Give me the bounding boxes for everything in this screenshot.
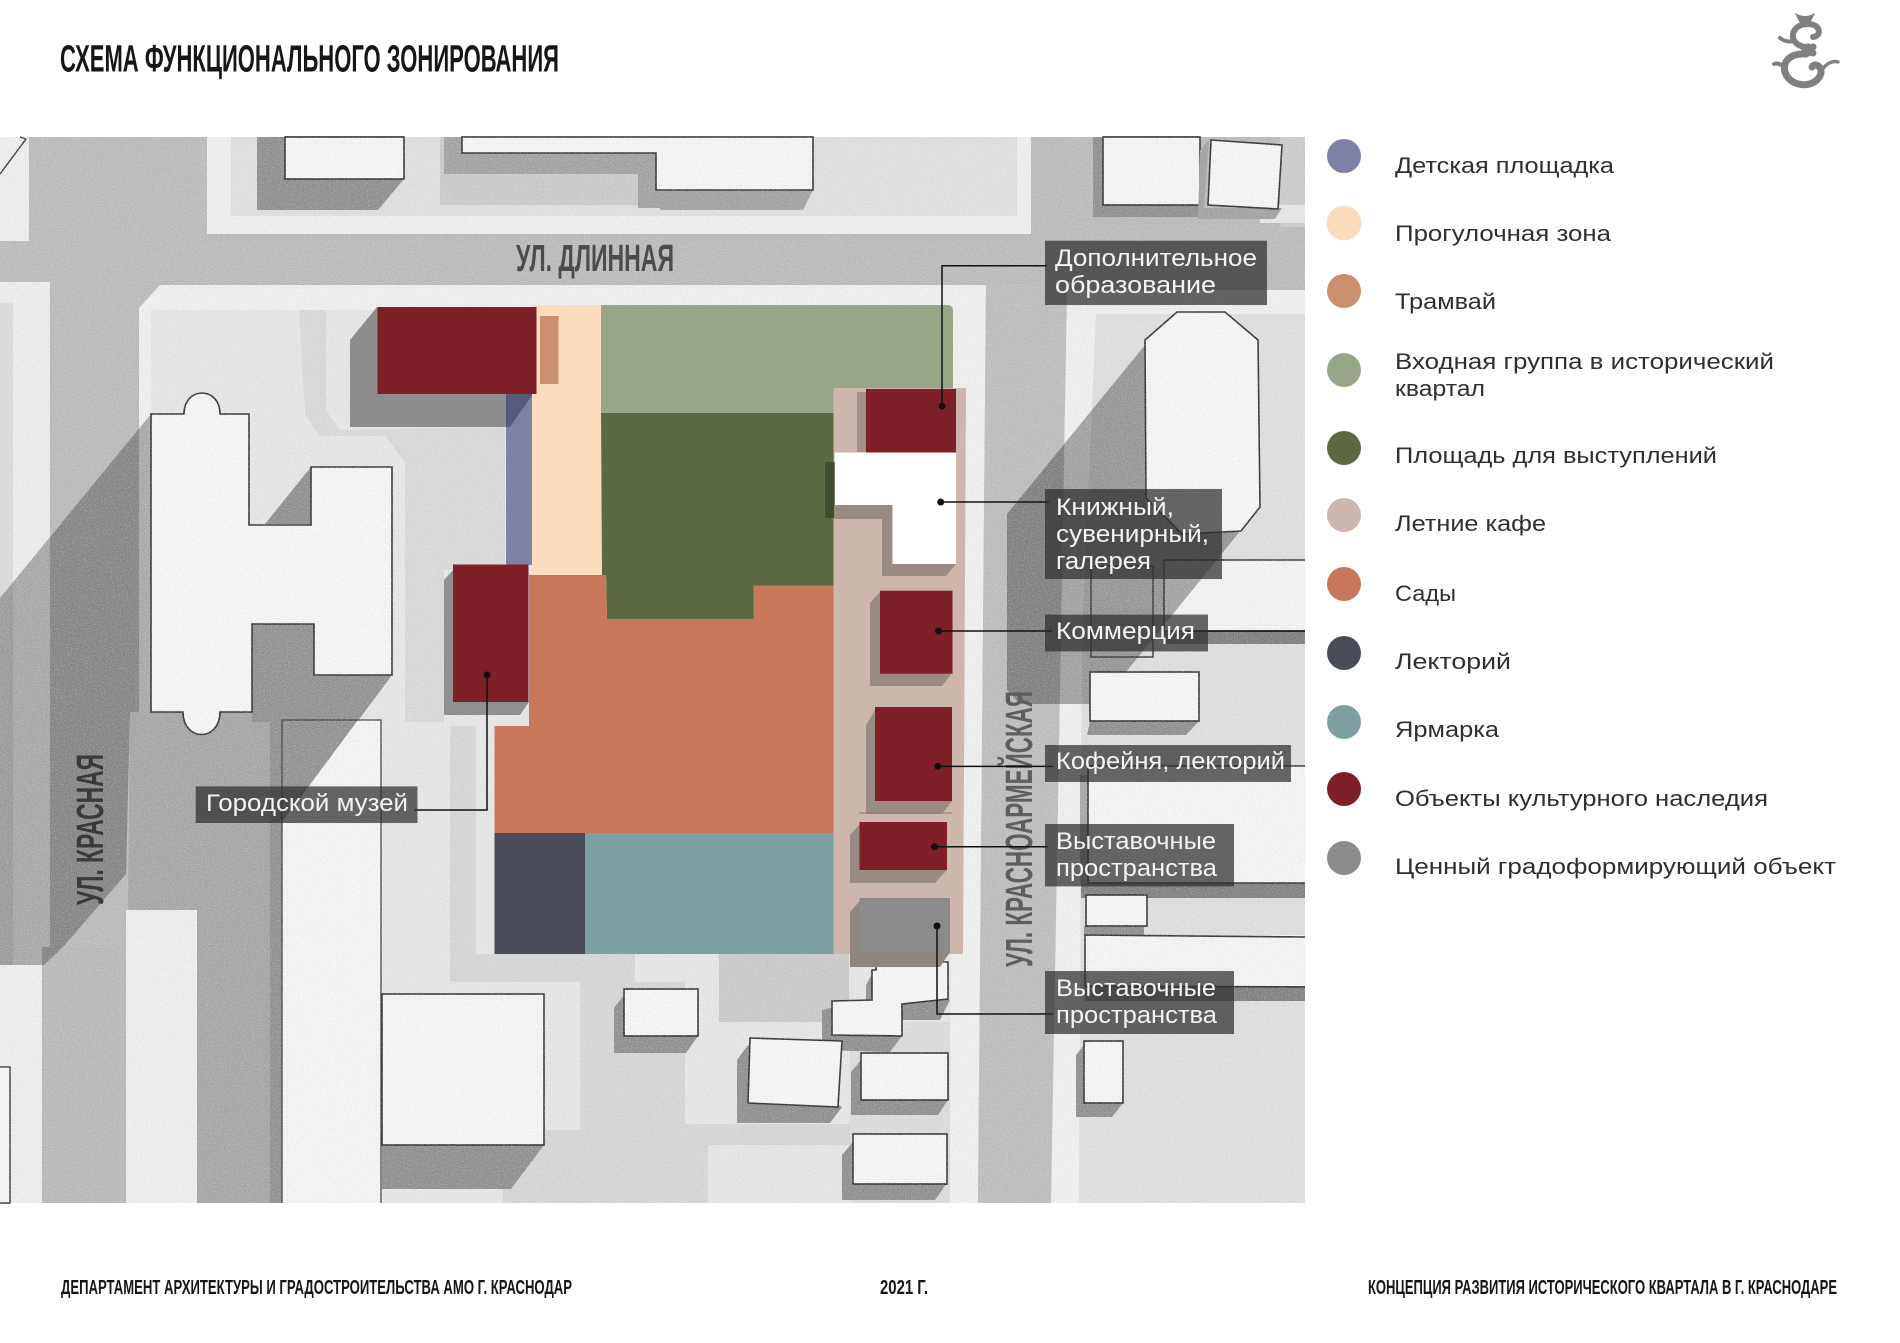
icon: ornamental logo bbox=[1774, 15, 1838, 85]
right block ground bbox=[1051, 290, 1305, 1203]
top right block bbox=[1093, 137, 1305, 227]
zone: gardens bbox=[494, 575, 834, 834]
street label: Красная: УЛ. КРАСНАЯ bbox=[70, 754, 112, 905]
callout: book souvenir gallery: сувенирный, bbox=[1056, 521, 1209, 548]
building: large historic building shadows bbox=[252, 467, 392, 822]
legend item: tram bbox=[1327, 274, 1496, 314]
building: L-shaped bbox=[832, 962, 948, 1036]
footer: year: 2021 Г. bbox=[880, 1277, 928, 1299]
building: large historic building bbox=[151, 393, 392, 734]
building: small C bbox=[861, 1053, 948, 1100]
legend item: fair bbox=[1327, 705, 1500, 742]
callout: exhibition spaces 2: Выставочные bbox=[1056, 975, 1216, 1002]
legend item: lecture hall bbox=[1327, 636, 1511, 674]
top left block bbox=[0, 137, 50, 965]
callout: exhibition spaces 1: Выставочные bbox=[1056, 828, 1216, 855]
zone: lecture hall bbox=[494, 833, 585, 954]
grain overlay light bbox=[0, 137, 1305, 1203]
callout: additional education: образование bbox=[1055, 272, 1216, 299]
legend item: heritage objects bbox=[1327, 772, 1768, 811]
zone: tram bbox=[540, 316, 558, 384]
legend item: performance square: Площадь для выступлений bbox=[1395, 443, 1717, 468]
legend item: valuable object bbox=[1327, 841, 1836, 879]
zone: fair bbox=[585, 833, 834, 954]
main block ground bbox=[139, 285, 986, 1203]
building: east long G bbox=[1085, 935, 1305, 1001]
legend item: lecture hall: Лекторий bbox=[1395, 649, 1511, 674]
heritage object: coffee lecture bbox=[859, 707, 952, 814]
legend item: entrance group bbox=[1327, 349, 1774, 401]
building: east small I bbox=[1087, 672, 1199, 735]
callout: book souvenir gallery bbox=[937, 489, 1222, 579]
callout: exhibition spaces 2: пространства bbox=[1056, 1002, 1218, 1029]
valuable object: exhibition bbox=[850, 898, 950, 967]
callout: coffee lecture bbox=[934, 745, 1291, 782]
legend item: walking area: Прогулочная зона bbox=[1395, 221, 1612, 246]
octagon building shadow bbox=[1007, 345, 1241, 704]
road base bbox=[0, 137, 1305, 1203]
legend item: summer cafes: Летние кафе bbox=[1395, 511, 1546, 536]
map: site plan bbox=[0, 137, 1305, 1203]
callout: exhibition spaces 1 bbox=[931, 824, 1234, 886]
callout: exhibition spaces 1: пространства bbox=[1056, 855, 1218, 882]
title: СХЕМА ФУНКЦИОНАЛЬНОГО ЗОНИРОВАНИЯ bbox=[60, 38, 559, 80]
diagonal shadow of museum building bbox=[0, 414, 151, 965]
building: small D bbox=[853, 1134, 947, 1184]
heritage object: museum bbox=[444, 564, 529, 715]
building shadows south cluster bbox=[614, 967, 950, 1200]
building: small A bbox=[624, 989, 698, 1036]
grain overlay dark bbox=[0, 137, 1305, 1203]
heritage object: exhibition bbox=[850, 822, 947, 883]
building: south square bbox=[382, 994, 544, 1189]
callout: book souvenir gallery: галерея bbox=[1056, 548, 1151, 575]
building: east small F bbox=[1084, 895, 1147, 935]
callout: additional education: Дополнительное bbox=[1055, 245, 1257, 272]
east building outlines bbox=[1091, 560, 1305, 657]
street label: Длинная: УЛ. ДЛИННАЯ bbox=[516, 238, 674, 280]
legend item: performance square bbox=[1327, 431, 1717, 468]
legend item: valuable object: Ценный градоформирующий объект bbox=[1395, 854, 1836, 879]
legend item: playground: Детская площадка bbox=[1395, 153, 1615, 178]
zone: performance square bbox=[601, 413, 834, 619]
zone: red building shadow north bbox=[350, 307, 536, 427]
callout: book souvenir gallery: Книжный, bbox=[1056, 494, 1174, 521]
building: tall rectangle bbox=[282, 720, 381, 1203]
callout: exhibition spaces 2 bbox=[934, 922, 1234, 1034]
legend item: fair: Ярмарка bbox=[1395, 717, 1500, 742]
legend item: entrance group: квартал bbox=[1395, 376, 1485, 401]
street label: Красноармейская: УЛ. КРАСНОАРМЕЙСКАЯ bbox=[996, 691, 1041, 967]
legend item: entrance group: Входная группа в исторический bbox=[1395, 349, 1774, 374]
footer: department: ДЕПАРТАМЕНТ АРХИТЕКТУРЫ И ГРАДОСТРОИТЕЛЬСТВА АМО Г. КРАСНОДАР bbox=[61, 1277, 572, 1299]
legend item: playground bbox=[1327, 139, 1615, 178]
building: east long H bbox=[1080, 766, 1305, 898]
building: octagonal bbox=[1145, 312, 1260, 534]
heritage object north bbox=[378, 307, 956, 452]
legend item: tram: Трамвай bbox=[1395, 289, 1496, 314]
callout: commerce: Коммерция bbox=[1056, 618, 1195, 645]
building: book and souvenir (white) bbox=[825, 452, 956, 576]
building: small B bbox=[748, 1038, 842, 1107]
south west ground bbox=[0, 712, 282, 1203]
callout: city museum bbox=[196, 672, 490, 823]
east street bbox=[978, 285, 1067, 1203]
building: east small E bbox=[1076, 1041, 1123, 1117]
zone: walking area bbox=[532, 305, 602, 575]
legend item: gardens: Сады bbox=[1395, 581, 1456, 606]
zone: children's playground bbox=[506, 393, 533, 565]
legend bbox=[1326, 139, 1836, 879]
top middle block bbox=[207, 137, 1031, 234]
legend item: summer cafes bbox=[1327, 498, 1546, 536]
callout: additional education bbox=[938, 241, 1267, 410]
callout: commerce bbox=[935, 615, 1305, 651]
heritage object: commerce bbox=[870, 591, 952, 686]
legend item: walking area bbox=[1326, 206, 1612, 246]
east building H2 bbox=[1164, 560, 1305, 644]
legend item: gardens bbox=[1327, 567, 1456, 606]
zone: entrance group bbox=[601, 305, 953, 413]
callout: city museum: Городской музей bbox=[206, 790, 408, 817]
legend item: heritage objects: Объекты культурного наследия bbox=[1395, 786, 1768, 811]
callout: coffee lecture: Кофейня, лекторий bbox=[1056, 748, 1285, 775]
zone: summer cafes bbox=[834, 388, 966, 954]
